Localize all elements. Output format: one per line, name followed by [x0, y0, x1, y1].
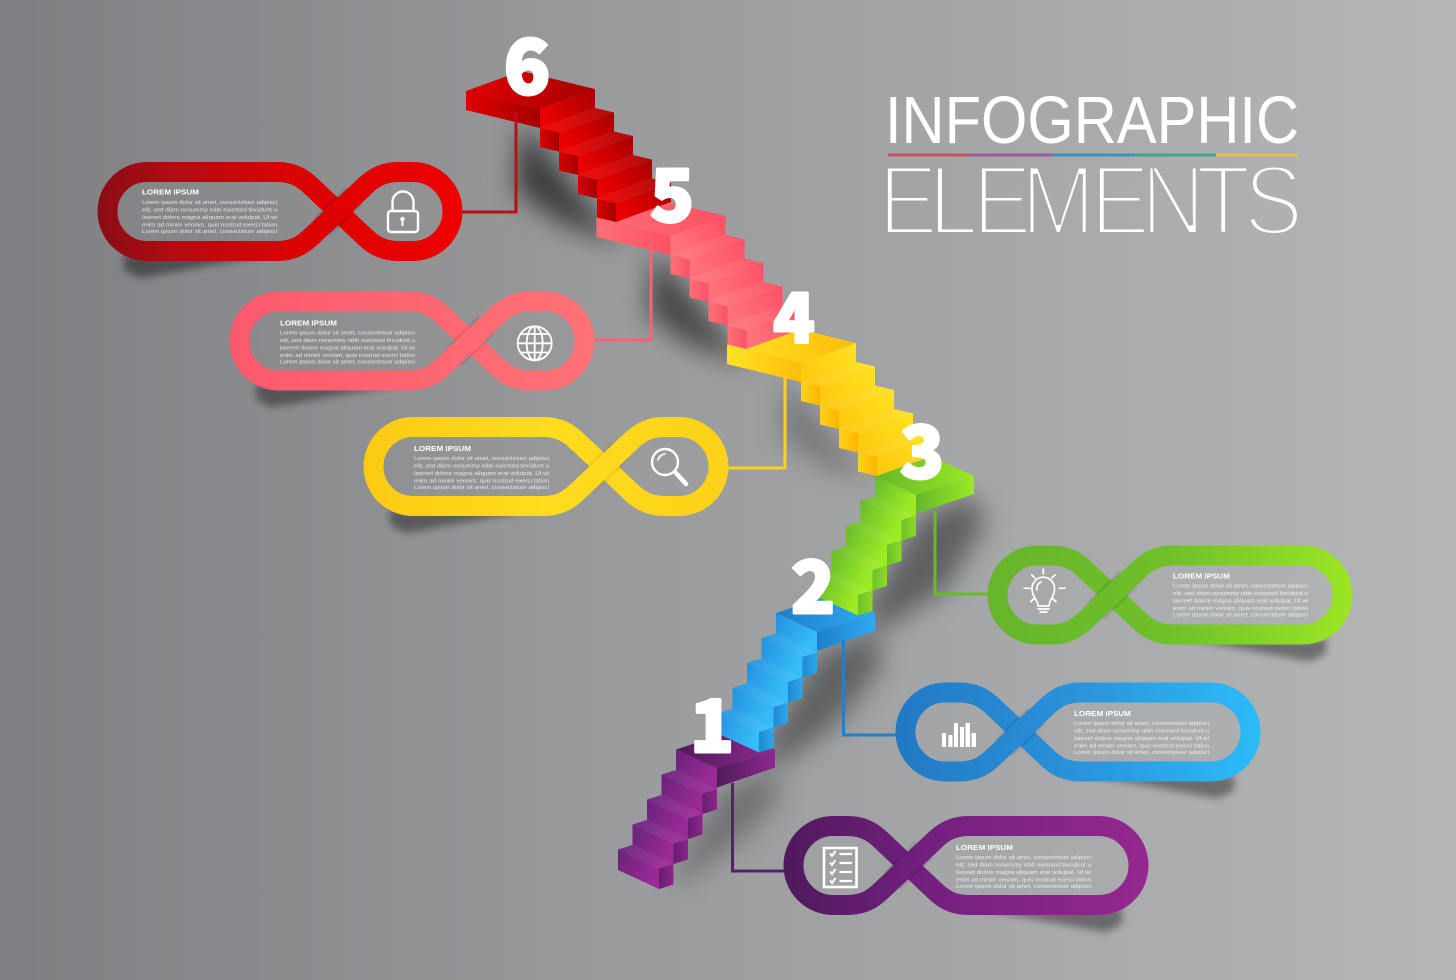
- text block: blue: laoreet dolore magna aliquam erat volutpat. Ut wi: [1074, 736, 1209, 742]
- connector: red: [462, 113, 516, 212]
- text block: green: elit, sed diam nonummy nibh euismod tincidunt u: [1173, 591, 1308, 597]
- text block: green: [1173, 574, 1308, 618]
- staircase: step 5 pink flight: [596, 198, 802, 349]
- heading: INFOGRAPHIC: INFOGRAPHIC: [885, 83, 1299, 158]
- icon: padlock: [388, 192, 418, 232]
- panel: red lock banner: [108, 113, 516, 278]
- text block: yellow: [414, 446, 549, 491]
- title: [878, 83, 1303, 256]
- infinity band: red: [108, 172, 452, 278]
- icon: light bulb: [1024, 569, 1065, 612]
- text block: blue: Lorem ipsum dolor sit amet, consectetuer adipisci: [1074, 721, 1209, 727]
- text block: yellow: Lorem ipsum dolor sit amet, consectetuer adipisci: [414, 456, 549, 462]
- staircase: step 6 red flight: [466, 71, 671, 222]
- infinity band: pink: [240, 302, 584, 408]
- icon: globe: [518, 326, 552, 360]
- text block: purple: [956, 845, 1091, 890]
- infinity band: green: [998, 556, 1342, 662]
- text block: blue: [1074, 711, 1209, 756]
- text block: purple: Lorem ipsum dolor sit amet, consectetuer adipisci: [956, 855, 1091, 861]
- text block: yellow: enim ad minim veniam, quis nostrud exerci tation: [414, 478, 549, 484]
- text block: pink: [280, 320, 415, 366]
- text block: red: LOREM IPSUM: [142, 190, 199, 196]
- connector: blue: [844, 640, 896, 735]
- text block: purple: laoreet dolore magna aliquam erat volutpat. Ut wi: [956, 870, 1091, 876]
- text block: yellow: Lorem ipsum dolor sit amet, consectetuer adipisci: [414, 485, 549, 491]
- text block: green: Lorem ipsum dolor sit amet, consectetuer adipisci: [1173, 612, 1308, 618]
- text block: red: Lorem ipsum dolor sit amet, consectetuer adipisci: [142, 200, 277, 206]
- staircase: step 1 purple flight: [618, 730, 775, 889]
- number 4: 4: [773, 264, 815, 362]
- text block: blue: enim ad minim veniam, quis nostrud exerci tation: [1074, 744, 1209, 750]
- connector: yellow: [728, 375, 785, 468]
- text block: green: laoreet dolore magna aliquam erat volutpat. Ut wi: [1173, 598, 1308, 604]
- text block: pink: LOREM IPSUM: [280, 320, 337, 328]
- panel: green bulb banner: [935, 510, 1342, 662]
- text block: purple: LOREM IPSUM: [956, 845, 1013, 852]
- text block: green: LOREM IPSUM: [1173, 574, 1230, 580]
- staircase: step 2 blue flight: [718, 594, 875, 752]
- text block: red: elit, sed diam nonummy nibh euismod tincidunt u: [142, 208, 277, 214]
- stair shadows: [515, 122, 985, 885]
- staircase: step 3 green flight: [817, 457, 974, 616]
- heading: ELEMENTS: ELEMENTS: [878, 145, 1303, 256]
- text block: purple: elit, sed diam nonummy nibh euismod tincidunt u: [956, 862, 1091, 868]
- text block: blue: LOREM IPSUM: [1074, 711, 1131, 718]
- text block: pink: Lorem ipsum dolor sit amet, consectetuer adipisci: [280, 330, 415, 336]
- panel: yellow search banner: [374, 375, 785, 533]
- text block: purple: enim ad minim veniam, quis nostrud exerci tation: [956, 878, 1091, 884]
- text block: pink: Lorem ipsum dolor sit amet, consectetuer adipisci: [280, 360, 415, 366]
- text block: purple: Lorem ipsum dolor sit amet, consectetuer adipisci: [956, 884, 1091, 890]
- text block: yellow: elit, sed diam nonummy nibh euismod tincidunt u: [414, 464, 549, 470]
- text block: pink: elit, sed diam nonummy nibh euismod tincidunt u: [280, 338, 415, 344]
- text block: green: enim ad minim veniam, quis nostrud exerci tation: [1173, 606, 1308, 612]
- connector: green: [935, 510, 988, 594]
- text block: yellow: LOREM IPSUM: [414, 446, 471, 453]
- staircase: step 4 yellow flight: [727, 325, 932, 476]
- text block: pink: laoreet dolore magna aliquam erat volutpat. Ut wi: [280, 346, 415, 352]
- number 2: 2: [791, 529, 835, 634]
- panel: purple checklist banner: [732, 783, 1138, 932]
- connector: pink: [594, 243, 651, 340]
- text block: pink: enim ad minim veniam, quis nostrud exerci tation: [280, 353, 415, 359]
- icon: checklist: [824, 848, 856, 887]
- panel: pink globe banner: [240, 243, 651, 408]
- text block: red: laoreet dolore magna aliquam erat volutpat. Ut wi: [142, 215, 277, 221]
- text block: red: [142, 190, 277, 235]
- infinity band: blue: [906, 692, 1250, 798]
- infinity band: yellow: [374, 427, 718, 533]
- panel: blue chart banner: [844, 640, 1250, 798]
- text block: green: Lorem ipsum dolor sit amet, consectetuer adipisci: [1173, 584, 1308, 590]
- text block: red: enim ad minim veniam, quis nostrud exerci tation: [142, 222, 277, 228]
- infinity band: purple: [794, 826, 1138, 932]
- rainbow divider: [888, 154, 1298, 156]
- number 1: 1: [690, 668, 734, 773]
- number 3: 3: [900, 394, 944, 499]
- icon: magnifier: [652, 449, 686, 484]
- text block: red: Lorem ipsum dolor sit amet, consectetuer adipisci: [142, 229, 277, 235]
- text block: blue: Lorem ipsum dolor sit amet, consectetuer adipisci: [1074, 750, 1209, 756]
- number 5: 5: [650, 138, 694, 242]
- number 6: 6: [504, 6, 550, 116]
- icon: bar chart: [942, 723, 976, 747]
- text block: yellow: laoreet dolore magna aliquam erat volutpat. Ut wi: [414, 471, 549, 477]
- connector: purple: [732, 783, 784, 871]
- text block: blue: elit, sed diam nonummy nibh euismod tincidunt u: [1074, 728, 1209, 734]
